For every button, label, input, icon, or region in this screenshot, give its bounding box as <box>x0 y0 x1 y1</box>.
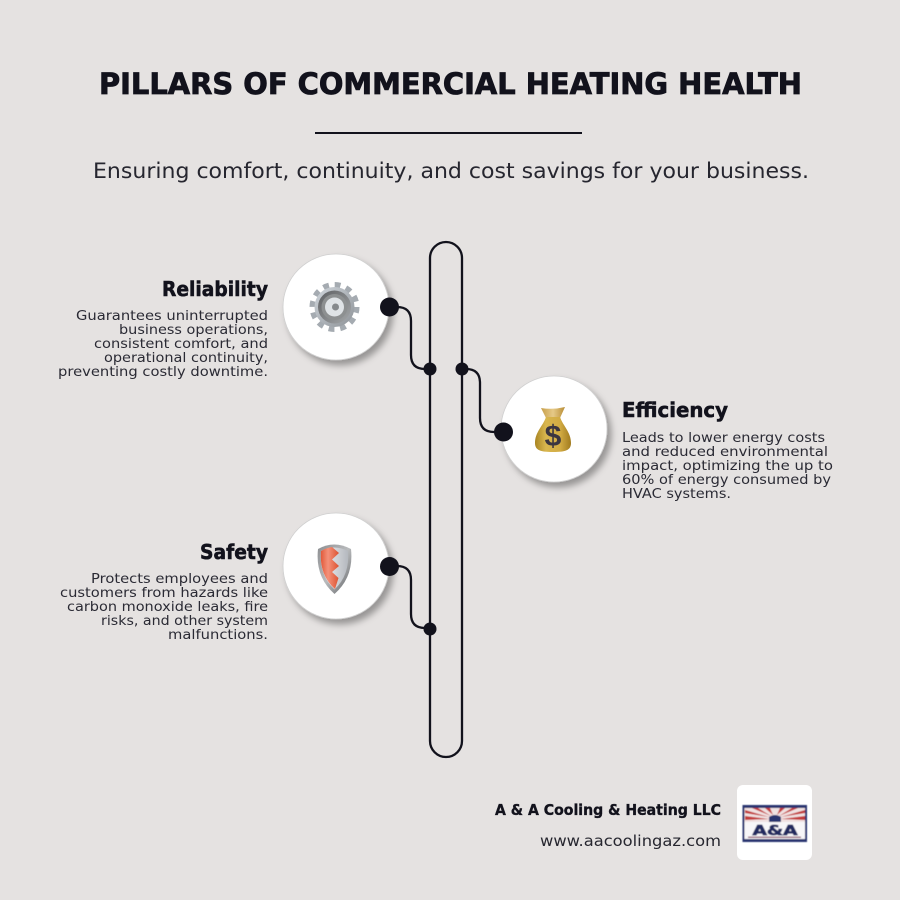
reliability icon circle <box>283 254 389 360</box>
panel: safety <box>60 513 436 643</box>
icon: shield <box>318 544 351 594</box>
logo: A&A <box>752 823 798 839</box>
safety text: malfunctions. <box>168 627 268 643</box>
subtitle: Ensuring comfort, continuity, and cost savings for your business. <box>93 159 809 184</box>
title: PILLARS OF COMMERCIAL HEATING HEALTH <box>99 67 802 101</box>
reliability text: consistent comfort, and <box>94 336 268 352</box>
efficiency icon circle <box>501 376 607 482</box>
panel: efficiency <box>456 362 833 502</box>
reliability text: Guarantees uninterrupted <box>76 308 268 324</box>
reliability text <box>58 308 268 380</box>
efficiency text: and reduced environmental <box>622 444 828 460</box>
reliability text: business operations, <box>119 322 268 338</box>
safety icon circle <box>283 513 389 619</box>
footer website: www.aacoolingaz.com <box>540 832 721 850</box>
logo <box>737 785 812 860</box>
efficiency text <box>622 430 833 502</box>
title divider <box>315 132 582 134</box>
reliability text: preventing costly downtime. <box>58 364 268 380</box>
safety text: customers from hazards like <box>60 585 268 601</box>
reliability text: operational continuity, <box>104 350 268 366</box>
efficiency text: impact, optimizing the up to <box>622 458 833 474</box>
footer company name: A & A Cooling & Heating LLC <box>495 801 721 819</box>
icon: money bag <box>535 407 571 453</box>
safety connector <box>380 557 436 636</box>
reliability heading: Reliability <box>162 277 268 301</box>
reliability connector <box>380 298 436 376</box>
icon: money bag: $ <box>545 420 562 453</box>
efficiency text: 60% of energy consumed by <box>622 472 831 488</box>
efficiency text: HVAC systems. <box>622 486 731 502</box>
safety text: Protects employees and <box>91 571 268 587</box>
icon: gear <box>314 286 356 328</box>
safety text: carbon monoxide leaks, fire <box>67 599 268 615</box>
safety text <box>60 571 268 643</box>
safety heading: Safety <box>200 540 268 564</box>
efficiency heading: Efficiency <box>622 398 728 422</box>
central timeline capsule <box>430 242 462 757</box>
efficiency connector <box>456 362 513 442</box>
safety text: risks, and other system <box>101 613 268 629</box>
panel: reliability <box>58 254 436 380</box>
efficiency text: Leads to lower energy costs <box>622 430 825 446</box>
